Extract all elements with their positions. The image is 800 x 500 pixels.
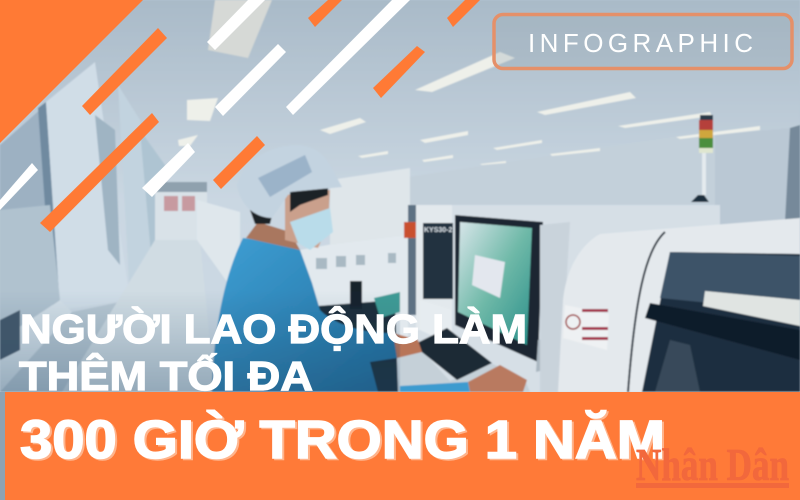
right machine dark screen (642, 252, 800, 392)
lower sleeve (400, 382, 470, 392)
left window (0, 108, 58, 340)
white stripe 2 (215, 44, 286, 116)
left wall (46, 62, 130, 310)
corridor floor (62, 240, 215, 392)
main inspection machine (404, 205, 720, 392)
right machine seam (628, 232, 665, 392)
blue jacket (212, 238, 397, 392)
left bench (0, 205, 60, 340)
hand on keyboard (393, 333, 422, 358)
ceiling lights (178, 0, 760, 165)
white stripe 5 (0, 163, 38, 210)
orange title band (5, 392, 800, 500)
white stripe 3 (286, 0, 410, 115)
black post (350, 281, 362, 309)
orange stripe 5 (373, 46, 425, 98)
signal tower (691, 115, 713, 202)
orange stripe 4 (308, 0, 342, 27)
title line 1: NGƯỜI LAO ĐỘNG LÀM (20, 306, 527, 352)
white stripe 4 (142, 143, 195, 197)
lower shading of the photo (0, 290, 400, 392)
rear equipment row (300, 230, 410, 392)
orange stripe 3 (213, 136, 265, 189)
right wall dark edge (785, 125, 800, 222)
rear equipment windows (316, 253, 396, 269)
cap panel (258, 155, 312, 197)
decorative orange stripes (40, 0, 480, 232)
highlighted title line (20, 410, 667, 472)
hairnet cap (237, 145, 342, 218)
desk (400, 342, 530, 392)
back hair (250, 210, 272, 224)
Nhân Dân watermark (636, 439, 789, 490)
corridor side machines (197, 200, 240, 300)
left window frame (38, 102, 60, 305)
orange stripe 1 (82, 28, 167, 115)
badge label: INFOGRAPHIC (528, 28, 753, 58)
face (285, 190, 330, 248)
title text: 300 GIỜ TRONG 1 NĂM (20, 410, 665, 470)
white stripe 1 (207, 0, 265, 50)
right wall panel (715, 128, 790, 225)
right machine casing (558, 218, 800, 392)
teal tray (374, 292, 400, 318)
title line 2: THÊM TỐI ĐA (19, 353, 313, 399)
left wall door (95, 115, 120, 265)
left strip beside the band (0, 392, 5, 500)
window sill (0, 300, 72, 392)
operator hand on mouse (468, 365, 527, 392)
lower left wall (0, 300, 130, 392)
dark space behind the arm (318, 300, 398, 392)
operator (212, 145, 422, 392)
warning sticker (563, 305, 609, 350)
keyboard (413, 328, 492, 380)
corridor wall panel (118, 85, 160, 300)
rear equipment arch (330, 168, 410, 245)
neck (246, 222, 300, 250)
machine side column (540, 222, 570, 392)
monitor (455, 215, 543, 362)
hair (290, 185, 328, 212)
infographic badge (494, 14, 792, 68)
monitor stand (536, 336, 554, 372)
face mask (290, 208, 333, 250)
orange corner triangle (0, 0, 143, 143)
back wall (400, 130, 720, 210)
title shadow: 300 GIỜ TRONG 1 NĂM (22, 412, 667, 472)
dark device on the bench (0, 310, 20, 360)
far corridor wall panel (140, 130, 170, 300)
main inspection machine: KYS30-2 (424, 227, 453, 234)
orange stripe 6 (447, 0, 480, 27)
orange stripe 2 (40, 113, 159, 232)
corridor back door (155, 182, 207, 240)
decorative white stripes (0, 0, 410, 210)
watermark underline (636, 483, 789, 488)
